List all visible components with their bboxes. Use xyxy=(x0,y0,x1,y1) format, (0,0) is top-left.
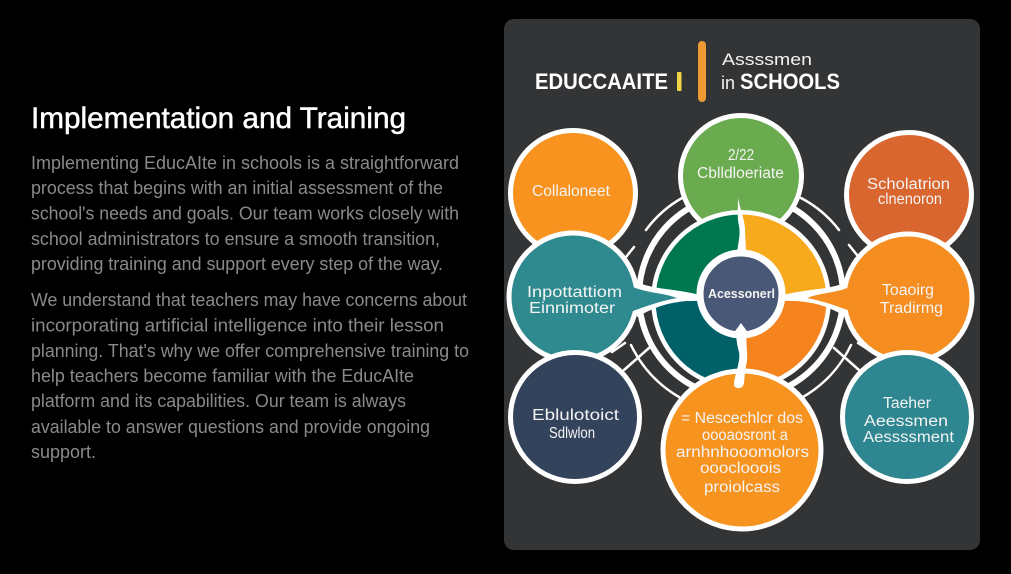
circle: Inpottattiom: Einnimoter xyxy=(529,300,615,317)
text block: first paragraph: Implementing EducAIte in schools is a straightforward xyxy=(31,153,459,173)
center circle: Assessment xyxy=(700,253,782,335)
central wheel xyxy=(650,210,836,390)
circle: Toaoirg Tradirmg: Toaoirg xyxy=(882,282,934,299)
center circle: Assessment: Acessonerl xyxy=(708,286,775,301)
circle: Scholatrion: clnenoron xyxy=(878,191,942,208)
circle: Eblulotoict: Eblulotoict xyxy=(532,407,620,424)
circle: Toaoirg Tradirmg xyxy=(783,234,972,362)
circle: Eblulotoict xyxy=(510,352,640,482)
circle: Teacher assessment: Taeher xyxy=(883,395,931,412)
infographic title: SCHOOLS xyxy=(740,69,840,94)
circle: 2/22 Cblldloeriate: 2/22 xyxy=(728,147,754,164)
text block: second paragraph: We understand that teachers may have concerns about xyxy=(31,290,467,310)
text block: first paragraph xyxy=(31,153,459,274)
panel background xyxy=(504,19,980,550)
heading: Implementation and Training xyxy=(31,102,406,135)
circle: bottom process: proiolcass xyxy=(704,479,780,496)
panel: infographic image xyxy=(504,19,980,550)
circle: Inpottattiom: Inpottattiom xyxy=(527,284,622,301)
circle: Teacher assessment: Aessssment xyxy=(863,429,955,446)
text block: first paragraph: school administrators to ensure a smooth transition, xyxy=(31,229,440,249)
text block: second paragraph: platform and its capabilities. Our team is always xyxy=(31,391,406,411)
circle: bottom process xyxy=(663,371,821,529)
infographic title: EDUCCAAITE xyxy=(535,69,668,94)
text block: first paragraph: process that begins with an initial assessment of the xyxy=(31,178,443,198)
circle: 2/22 Cblldloeriate xyxy=(680,116,802,236)
text block: first paragraph: providing training and support every step of the way. xyxy=(31,254,443,274)
circle: Teacher assessment xyxy=(842,352,972,482)
circle: bottom process: arnhnhooomolors xyxy=(676,444,809,461)
circle: Eblulotoict: Sdlwlon xyxy=(549,425,595,442)
circle: Toaoirg Tradirmg: Tradirmg xyxy=(880,300,943,317)
circle: Collaloneet: Collaloneet xyxy=(532,183,611,200)
connector arcs xyxy=(612,194,872,398)
circle: bottom process: = Nescechlcr dos xyxy=(681,410,803,427)
text block: second paragraph: incorporating artificial intelligence into their lesson xyxy=(31,316,444,336)
circle: bottom process: oooaosront a xyxy=(702,427,788,444)
text block: first paragraph: school's needs and goals. Our team works closely with xyxy=(31,204,459,224)
circle: Scholatrion: Scholatrion xyxy=(867,176,950,193)
text block: second paragraph: support. xyxy=(31,442,96,462)
circle: Inpottattiom xyxy=(509,233,700,361)
circle: bottom process: oooclooois xyxy=(700,460,781,477)
text block: second paragraph: available to answer questions and provide ongoing xyxy=(31,417,430,437)
circle: 2/22 Cblldloeriate: Cblldloeriate xyxy=(697,165,784,182)
circle: Collaloneet xyxy=(510,130,636,256)
infographic title: in xyxy=(721,73,735,93)
circle: Teacher assessment: Aeessmen xyxy=(864,413,948,430)
text block: second paragraph: planning. That's why we offer comprehensive training to xyxy=(31,341,469,361)
text block: second paragraph: help teachers become familiar with the EducAIte xyxy=(31,366,414,386)
infographic title xyxy=(535,41,840,102)
infographic title: Assssmen xyxy=(722,50,812,69)
text block: second paragraph xyxy=(31,290,469,462)
circle: Scholatrion xyxy=(846,132,972,258)
vertical pointer dividers xyxy=(734,198,747,388)
